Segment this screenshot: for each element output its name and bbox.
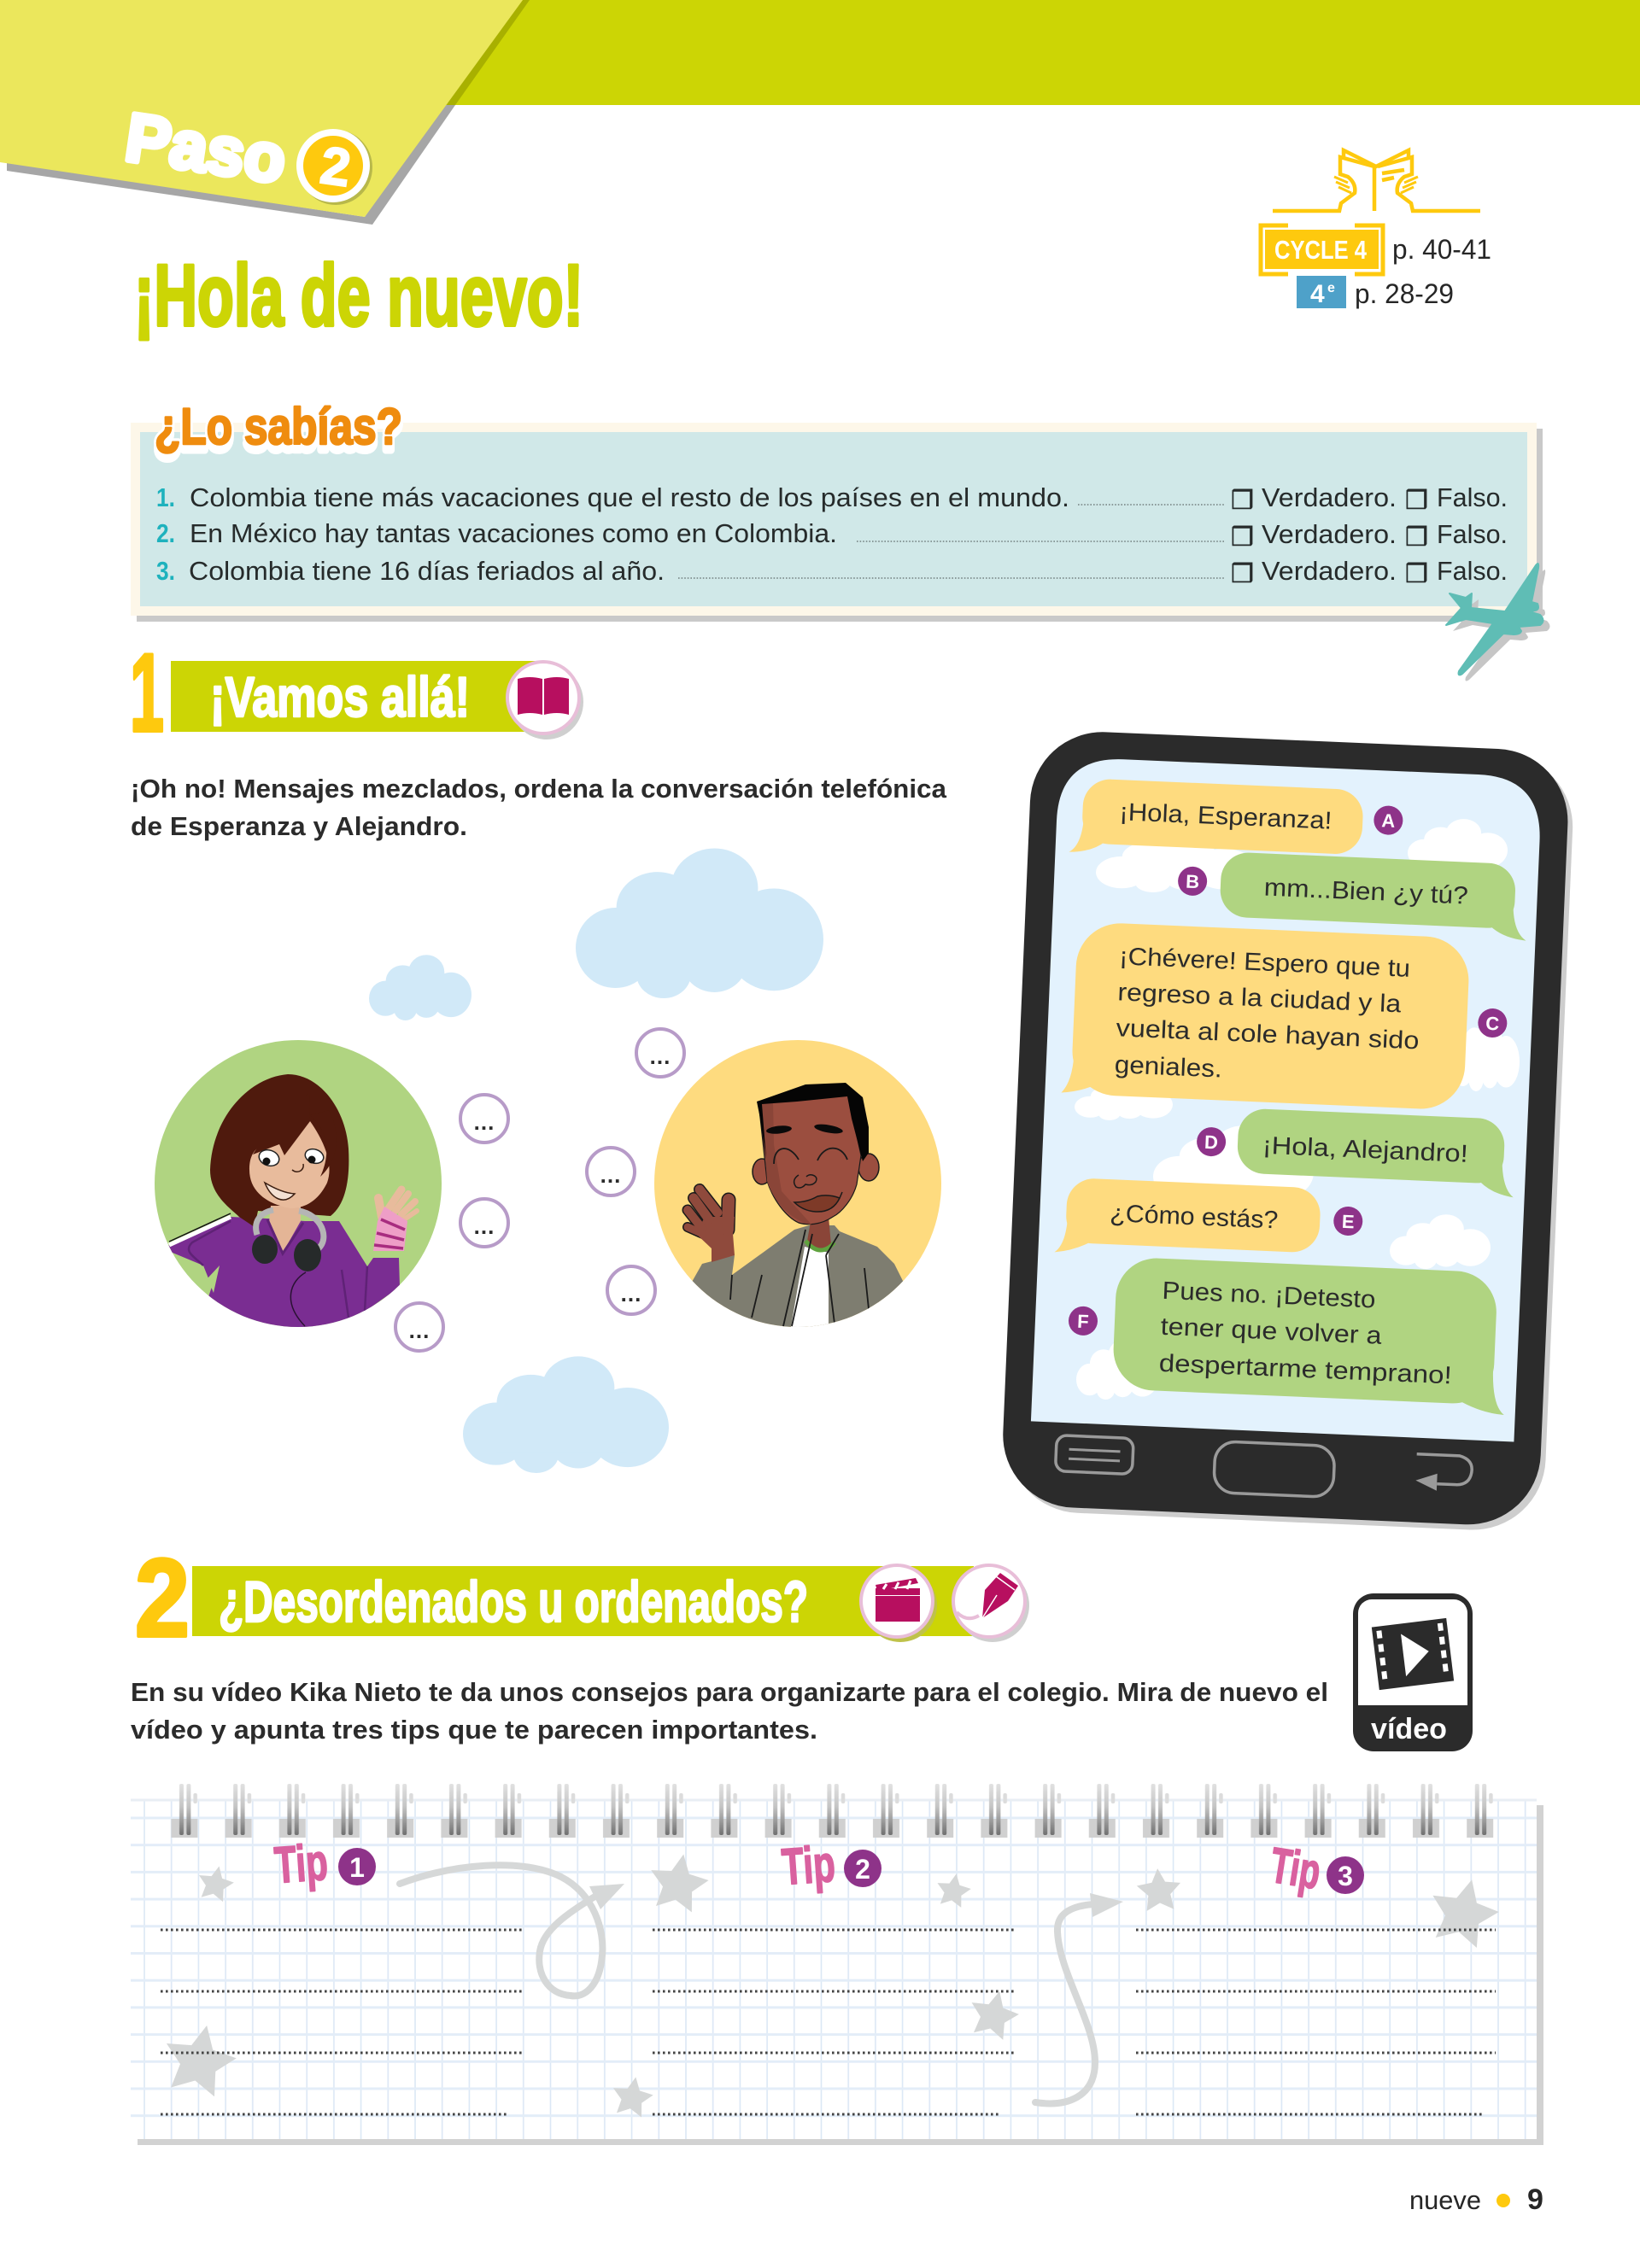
hair bbox=[757, 1083, 869, 1161]
cycle 4 badge: CYCLE 4 bbox=[1274, 235, 1368, 265]
heading: lo sabías: ¿Lo sabías? bbox=[155, 398, 402, 455]
icon: pen nib bbox=[953, 1565, 1029, 1642]
statement 2: ❒ bbox=[1405, 523, 1428, 552]
bubble F: tener que volver a bbox=[1160, 1313, 1383, 1350]
answer bubbles: ... bbox=[650, 1043, 671, 1069]
stars bbox=[158, 1850, 1505, 2119]
phone menu button bbox=[1055, 1435, 1133, 1474]
wrist warmer bbox=[373, 1207, 407, 1251]
statement 3 bbox=[156, 556, 1508, 589]
bubble B bbox=[1219, 851, 1529, 941]
bubble A: ¡Hola, Esperanza! bbox=[1119, 798, 1332, 835]
bubble F bbox=[1111, 1257, 1510, 1415]
phone back button bbox=[1415, 1454, 1473, 1492]
spiral rings bbox=[157, 1780, 1507, 1840]
lips bbox=[794, 1195, 840, 1212]
bubble F: despertarme temprano! bbox=[1158, 1350, 1452, 1389]
answer bubbles: ... bbox=[474, 1109, 495, 1135]
panel: notebook bbox=[131, 1780, 1543, 2145]
bubble D bbox=[1236, 1108, 1517, 1197]
cloud large bbox=[576, 849, 823, 998]
arrow: loop bbox=[400, 1865, 624, 1996]
illustration: girl Esperanza bbox=[155, 1040, 442, 1332]
step number badge: 2 bbox=[317, 136, 354, 198]
step number badge bbox=[296, 129, 372, 205]
label F bbox=[1068, 1306, 1098, 1336]
heading bar bbox=[192, 1566, 974, 1636]
sweater bbox=[162, 1217, 400, 1332]
nose bbox=[292, 1164, 303, 1172]
4e badge: 4 bbox=[1310, 280, 1325, 308]
film strip bbox=[1372, 1618, 1454, 1690]
label B: B bbox=[1186, 871, 1200, 892]
statement 2: 2. bbox=[156, 518, 175, 548]
4e badge bbox=[1297, 276, 1346, 308]
jacket bbox=[688, 1225, 907, 1332]
nose bbox=[794, 1175, 817, 1188]
icon: hands holding book bbox=[1273, 150, 1480, 211]
face bbox=[758, 1096, 861, 1225]
statement 1: Verdadero. bbox=[1262, 482, 1397, 512]
section 1 heading bbox=[130, 630, 583, 755]
statement 1: Colombia tiene más vacaciones que el resto de los países en el mundo. bbox=[190, 482, 1069, 512]
header tab with Paso label bbox=[0, 0, 530, 225]
mouth bbox=[265, 1183, 295, 1200]
instruction 2 bbox=[131, 1677, 1328, 1745]
cycle reference block bbox=[1261, 150, 1491, 309]
hand bbox=[378, 1190, 417, 1219]
instruction 1: de Esperanza y Alejandro. bbox=[131, 811, 467, 841]
statement 3: Colombia tiene 16 días feriados al año. bbox=[189, 556, 665, 586]
statement 3: Verdadero. bbox=[1262, 556, 1397, 586]
panel: lo sabías bbox=[131, 398, 1543, 622]
arrow: S curve bbox=[1035, 1893, 1123, 2103]
neck bbox=[807, 1219, 831, 1248]
header band bbox=[0, 0, 1640, 105]
tip 1 heading: 1 bbox=[349, 1852, 365, 1883]
statement 1: ❒ bbox=[1231, 486, 1254, 516]
answer bubbles: ... bbox=[409, 1318, 430, 1343]
icon: clapperboard bbox=[861, 1565, 937, 1642]
page reference 4e: p. 28-29 bbox=[1355, 278, 1454, 309]
shirt bbox=[790, 1247, 829, 1332]
bubble A bbox=[1069, 778, 1364, 864]
bubble B: mm...Bien ¿y tú? bbox=[1263, 874, 1468, 910]
number 2: 2 bbox=[135, 1535, 190, 1660]
bubble F: Pues no. ¡Detesto bbox=[1162, 1277, 1376, 1313]
statement 1 bbox=[156, 482, 1508, 516]
tip 1 heading: Tip bbox=[272, 1833, 330, 1894]
cloud bottom bbox=[463, 1356, 669, 1473]
label F: F bbox=[1077, 1311, 1089, 1332]
label C: C bbox=[1485, 1013, 1500, 1034]
number 1: 1 bbox=[130, 630, 164, 755]
bubble C: vuelta al cole hayan sido bbox=[1116, 1014, 1420, 1055]
cycle 4 badge bbox=[1261, 225, 1383, 274]
label A: A bbox=[1381, 810, 1396, 832]
title: ¡Hola de nuevo! bbox=[134, 247, 583, 344]
headphones bbox=[256, 1210, 324, 1248]
label B bbox=[1177, 866, 1208, 897]
tip 3 heading: Tip bbox=[1267, 1838, 1324, 1900]
heading text: ¿Desordenados u ordenados? bbox=[219, 1569, 808, 1634]
face bbox=[249, 1121, 330, 1208]
icon: plane bbox=[1446, 564, 1549, 681]
jacket lines bbox=[730, 1230, 869, 1326]
bubble C bbox=[1061, 921, 1471, 1111]
eyes bbox=[258, 1149, 280, 1166]
eyes bbox=[774, 1149, 847, 1164]
heading: lo sabías: ¿Lo sabías? bbox=[155, 398, 402, 455]
label A bbox=[1374, 805, 1403, 835]
instruction 1 bbox=[131, 774, 947, 841]
statement 2: En México hay tantas vacaciones como en Colombia. bbox=[190, 518, 837, 548]
statement 2: Verdadero. bbox=[1262, 519, 1397, 549]
instruction 2: vídeo y apunta tres tips que te parecen importantes. bbox=[131, 1715, 817, 1745]
heading text: ¡Vamos allá! bbox=[210, 665, 470, 728]
hand bbox=[696, 1217, 735, 1262]
page number bbox=[1409, 2183, 1543, 2216]
label E: E bbox=[1341, 1211, 1355, 1232]
statement 3: ❒ bbox=[1231, 559, 1254, 589]
hand outline bbox=[688, 1190, 729, 1234]
4e badge: e bbox=[1327, 281, 1335, 295]
page reference cycle: p. 40-41 bbox=[1392, 234, 1491, 265]
statement 2: ❒ bbox=[1231, 523, 1254, 552]
instruction 2: En su vídeo Kika Nieto te da unos consejos para organizarte para el colegio. Mira de nuevo el bbox=[131, 1677, 1328, 1707]
page number: nueve bbox=[1409, 2185, 1481, 2215]
brows bbox=[766, 1125, 792, 1134]
answer bubbles: ... bbox=[600, 1162, 621, 1188]
label D: D bbox=[1204, 1131, 1219, 1153]
icon: book bbox=[507, 662, 583, 739]
statement 3: 3. bbox=[156, 556, 175, 586]
icon: video badge bbox=[1353, 1593, 1473, 1751]
answer bubbles: ... bbox=[621, 1281, 641, 1306]
Paso text: Paso bbox=[121, 99, 291, 197]
section 2 heading bbox=[135, 1535, 1029, 1660]
label D bbox=[1196, 1126, 1227, 1157]
cloud small bbox=[369, 955, 472, 1020]
answer lines bbox=[161, 1930, 1496, 2114]
fringe bbox=[253, 1121, 310, 1155]
statement 3: ❒ bbox=[1405, 559, 1428, 589]
page number: 9 bbox=[1527, 2183, 1543, 2216]
statement 2: Falso. bbox=[1437, 519, 1508, 549]
instruction 1: ¡Oh no! Mensajes mezclados, ordena la conversación telefónica bbox=[131, 774, 947, 804]
statement 1: 1. bbox=[156, 482, 175, 512]
bubble C: regreso a la ciudad y la bbox=[1117, 979, 1403, 1018]
bubble E bbox=[1054, 1177, 1321, 1264]
statement 3: Falso. bbox=[1437, 556, 1508, 586]
heading: lo sabías: ¿Lo sabías? bbox=[155, 404, 402, 461]
phone home button bbox=[1214, 1441, 1335, 1498]
bubble D: ¡Hola, Alejandro! bbox=[1262, 1132, 1468, 1168]
ears bbox=[752, 1158, 767, 1185]
phone shadow bbox=[1004, 734, 1576, 1533]
answer bubbles bbox=[395, 1029, 684, 1351]
statement 1: ❒ bbox=[1405, 486, 1428, 516]
statement 1: Falso. bbox=[1437, 482, 1508, 512]
tip 2 heading: Tip bbox=[780, 1835, 837, 1896]
phone body bbox=[1000, 729, 1571, 1528]
bubble C: geniales. bbox=[1114, 1051, 1222, 1084]
bubble C: ¡Chévere! Espero que tu bbox=[1119, 943, 1411, 983]
video label: vídeo bbox=[1371, 1713, 1447, 1745]
answer bubbles: ... bbox=[474, 1213, 495, 1239]
neck bbox=[269, 1206, 301, 1253]
label E bbox=[1333, 1206, 1363, 1236]
hair bbox=[210, 1074, 348, 1227]
illustration: boy Alejandro bbox=[654, 1040, 941, 1332]
tip 3 heading: 3 bbox=[1338, 1861, 1353, 1891]
bubble E: ¿Cómo estás? bbox=[1110, 1200, 1279, 1234]
label C bbox=[1478, 1008, 1508, 1038]
tip 2 heading: 2 bbox=[855, 1854, 870, 1885]
phone screen bbox=[1031, 757, 1543, 1442]
phone bbox=[999, 729, 1576, 1533]
heading bar bbox=[171, 661, 538, 732]
statement 2 bbox=[156, 518, 1508, 552]
phone clouds bbox=[1075, 819, 1520, 1400]
